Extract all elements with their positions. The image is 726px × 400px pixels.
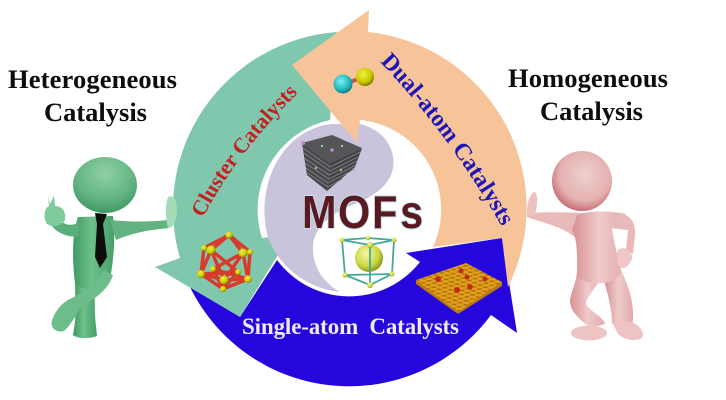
left foot [571,326,607,340]
hand on wall [527,192,537,216]
right leg [604,268,633,326]
figure: pink man (homogeneous) [527,151,643,340]
left fist and thumb [45,196,65,226]
arrow: single-atom blue [190,238,517,386]
torso [572,212,626,283]
icon: icosahedron cluster [197,232,253,292]
label: Single-atom Catalysts: Single-atom Catalysts [242,314,459,339]
left leg [570,272,605,328]
icon: single-atom catalyst plate [416,263,502,314]
left arm [52,220,80,237]
heading: Heterogeneous Catalysis: Heterogeneous [8,64,177,94]
heading: Heterogeneous Catalysis [8,64,177,127]
head [552,151,612,211]
right arm [110,220,169,240]
right arm [610,213,635,254]
arrow: cluster green [155,32,337,317]
right foot [612,322,643,340]
heading: Homogeneous Catalysis [508,63,668,126]
tie [95,213,107,268]
crossed leg [52,270,113,331]
hand on hip [617,248,632,268]
head [73,157,137,213]
label: Cluster Catalysts: Cluster Catalysts [193,86,296,215]
title: MOFs: MOFs [302,187,423,239]
heading: Homogeneous Catalysis: Homogeneous [508,63,668,93]
central yin-yang purple shape [264,124,393,292]
arrow: dual-atom orange [292,10,527,287]
label: Dual-atom Catalysts: Dual-atom Catalysts [380,52,510,225]
right hand [166,196,177,228]
torso [73,216,114,290]
icon: dual atom molecule [334,68,374,94]
icon: MOF crystal cube [301,135,362,191]
arm to wall [527,212,582,238]
standing leg [73,280,97,338]
figure: green man (heterogeneous) [45,157,177,338]
heading: Heterogeneous Catalysis: Catalysis [44,97,147,127]
icon: single atom in cage [340,236,396,288]
heading: Homogeneous Catalysis: Catalysis [540,96,643,126]
